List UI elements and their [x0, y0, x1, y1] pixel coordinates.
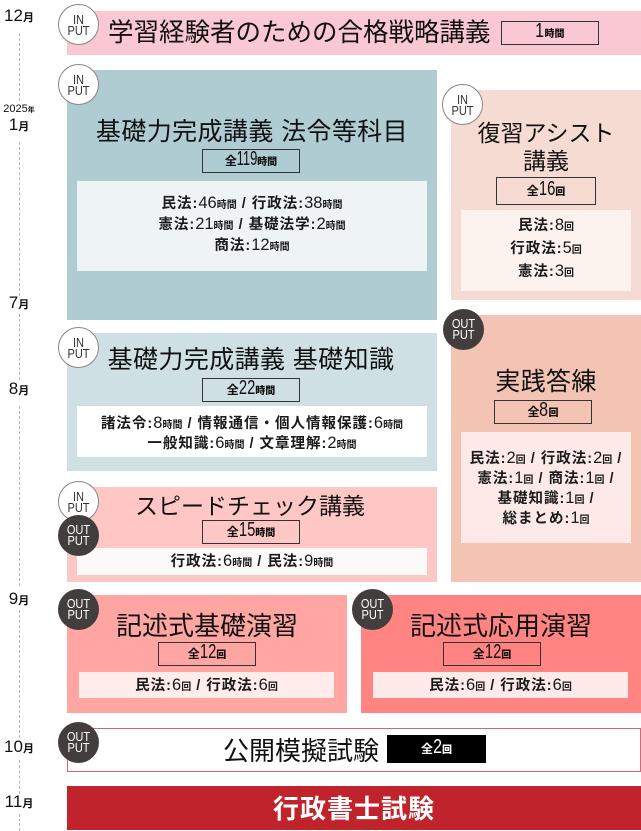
subject breakdown: 憲法:1回 / 商法:1回 / — [477, 469, 615, 487]
month: January 2025: 2025年 — [3, 103, 35, 115]
badge: output, written basics: OUT — [67, 596, 90, 611]
badge: input, strategy lecture: PUT — [67, 23, 90, 38]
month: December: 12月 — [4, 6, 34, 25]
badge: input, general knowledge: IN — [73, 335, 84, 350]
panel: written applied — [361, 595, 641, 713]
badge: input, review assist — [442, 84, 483, 125]
panel: review assist — [451, 90, 641, 300]
badge: output, mock exam: OUT — [67, 729, 90, 744]
count box — [494, 400, 592, 424]
panel: public mock exam — [67, 728, 641, 772]
heading: 復習アシスト — [477, 120, 615, 146]
count box: 全 回 — [188, 647, 226, 661]
subject breakdown — [79, 672, 334, 698]
badge: output, written basics: PUT — [67, 607, 90, 622]
heading: 公開模擬試験 — [223, 736, 379, 766]
badge: output, mock exam: PUT — [67, 740, 90, 755]
duration box: 全 時間 — [227, 383, 275, 397]
heading: 基礎力完成講義 基礎知識 — [108, 346, 394, 374]
panel: fundamentals statutes — [67, 70, 437, 320]
month: October: 10月 — [4, 737, 34, 756]
heading: 基礎力完成講義 法令等科目 — [96, 118, 408, 146]
subject breakdown: 民法:8回 — [518, 216, 574, 234]
duration box — [202, 149, 300, 173]
duration box: 全 時間 — [225, 154, 277, 168]
subject breakdown — [461, 432, 631, 543]
duration box: 時間 — [544, 29, 564, 40]
badge: output, speed check: PUT — [67, 533, 90, 548]
badge: output, written applied: PUT — [361, 607, 384, 622]
subject breakdown: 諸法令:8時間 / 情報通信・個人情報保護:6時間 — [101, 414, 403, 432]
subject breakdown — [461, 210, 631, 291]
heading — [477, 120, 615, 174]
count box: 8 — [540, 399, 548, 421]
count box: 2 — [433, 736, 442, 758]
subject breakdown — [77, 406, 427, 457]
badge: input, review assist: IN — [457, 92, 468, 107]
subject breakdown — [77, 548, 427, 575]
badge: output, practice writing — [443, 309, 484, 350]
panel: written basics — [67, 595, 347, 713]
month: January 2025: 1月 — [9, 115, 29, 134]
month: January 2025 — [3, 103, 35, 134]
panel: final exam — [67, 786, 641, 830]
badge: input, statutes: IN — [73, 72, 84, 87]
count box — [443, 642, 541, 666]
count box — [158, 642, 256, 666]
badge: input, speed check: IN — [73, 489, 84, 504]
month: July: 7月 — [9, 293, 29, 312]
count box: 全 回 — [528, 405, 558, 419]
badge: output, practice writing: PUT — [452, 327, 475, 342]
badge: output, mock exam — [58, 722, 99, 763]
count box: 全 回 — [527, 184, 565, 198]
subject breakdown — [77, 181, 427, 271]
badge: output, written basics — [58, 589, 99, 630]
heading: 実践答練 — [495, 368, 597, 396]
subject breakdown: 基礎知識:1回 / — [497, 489, 595, 507]
badge: output, speed check: OUT — [67, 522, 90, 537]
badge: input, general knowledge: PUT — [67, 346, 90, 361]
duration box — [501, 21, 599, 45]
subject breakdown — [373, 672, 628, 698]
month: September: 9月 — [9, 589, 29, 608]
duration box: 119 — [237, 148, 257, 170]
subject breakdown: 一般知識:6時間 / 文章理解:2時間 — [147, 434, 357, 452]
panel: fundamentals general knowledge — [67, 333, 437, 471]
subject breakdown: 民法:46時間 / 行政法:38時間 — [162, 194, 342, 212]
heading: 行政書士試験 — [273, 794, 435, 824]
subject breakdown: 行政法:5回 — [510, 239, 582, 257]
subject breakdown: 民法:2回 / 行政法:2回 / — [470, 449, 622, 467]
subject breakdown: 民法:6回 / 行政法:6回 — [135, 676, 278, 694]
duration box — [202, 520, 300, 544]
count box — [496, 177, 596, 205]
heading: 講義 — [523, 148, 569, 174]
badge: input, general knowledge — [58, 327, 99, 368]
heading: 記述式基礎演習 — [116, 611, 298, 641]
heading: 記述式応用演習 — [410, 611, 592, 641]
count box: 全 回 — [421, 742, 452, 756]
subject breakdown: 民法:6回 / 行政法:6回 — [429, 676, 572, 694]
duration box: 15 — [239, 519, 255, 541]
badge: output, speed check — [58, 515, 99, 556]
heading: スピードチェック講義 — [135, 493, 365, 519]
badge: output, written applied: OUT — [361, 596, 384, 611]
subject breakdown: 総まとめ:1回 — [502, 509, 590, 527]
badge: input, speed check — [58, 481, 99, 522]
count box: 16 — [539, 178, 555, 200]
month: August: 8月 — [9, 379, 29, 398]
subject breakdown: 憲法:3回 — [518, 262, 574, 280]
duration box: 全 時間 — [227, 525, 275, 539]
badge: output, practice writing: OUT — [452, 316, 475, 331]
badge: input, speed check: PUT — [67, 500, 90, 515]
subject breakdown: 憲法:21時間 / 基礎法学:2時間 — [158, 215, 346, 233]
count box: 12 — [485, 641, 501, 663]
badge: input, strategy lecture — [58, 4, 99, 45]
count box — [387, 735, 486, 763]
panel: strategy lecture — [67, 11, 641, 55]
badge: input, review assist: PUT — [451, 103, 474, 118]
badge: input, statutes: PUT — [67, 83, 90, 98]
badge: output, written applied — [352, 589, 393, 630]
subject breakdown: 商法:12時間 — [214, 236, 290, 254]
badge: input, strategy lecture: IN — [73, 12, 84, 27]
panel: speed check — [67, 487, 437, 582]
duration box — [202, 378, 300, 402]
duration box: 22 — [239, 377, 255, 399]
duration box: 1 — [536, 20, 544, 42]
heading: 学習経験者のための合格戦略講義 — [108, 19, 491, 47]
count box: 12 — [200, 641, 216, 663]
count box: 全 回 — [473, 647, 511, 661]
subject breakdown: 行政法:6時間 / 民法:9時間 — [171, 552, 333, 570]
month: November: 11月 — [5, 792, 33, 811]
badge: input, statutes — [58, 64, 99, 105]
panel: practice writing — [451, 315, 641, 582]
